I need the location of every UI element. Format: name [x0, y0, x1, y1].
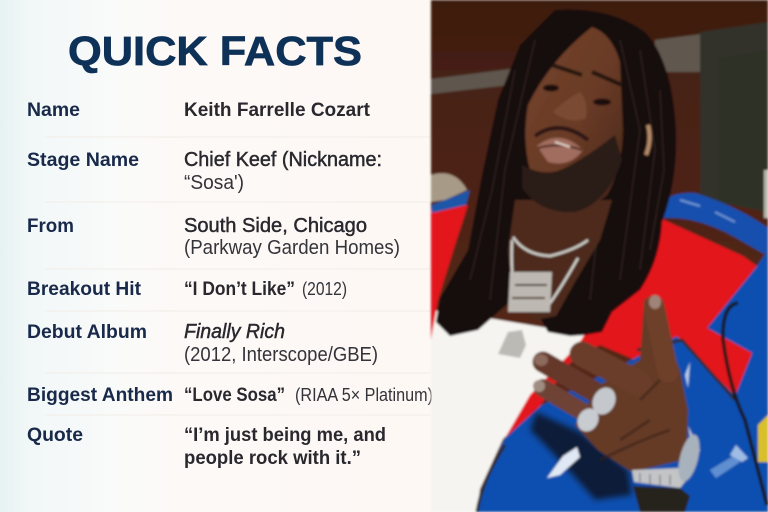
value: stage name	[184, 149, 382, 194]
ring	[588, 384, 620, 418]
label: breakout hit: Breakout Hit	[27, 278, 141, 300]
neck and chest	[508, 200, 612, 320]
value: biggest anthem: “Love Sosa”	[184, 384, 285, 406]
value: quote: people rock with it.”	[184, 447, 361, 469]
value: quote: “I’m just being me, and	[184, 424, 386, 446]
value: stage name: Chief Keef (Nickname:	[184, 149, 382, 171]
panel: quick facts	[0, 0, 433, 512]
ring	[573, 405, 603, 435]
portrait photo illustration	[431, 0, 768, 512]
value: quote	[184, 424, 386, 469]
row: stage name	[27, 149, 382, 194]
value: debut album: (2012, Interscope/GBE)	[184, 344, 378, 366]
row: name	[27, 99, 370, 121]
label: debut album: Debut Album	[27, 321, 147, 343]
label: name: Name	[27, 99, 80, 121]
value: stage name: “Sosa')	[184, 172, 244, 194]
value: debut album: Finally Rich	[184, 321, 285, 343]
value: from: South Side, Chicago	[184, 215, 367, 237]
value: biggest anthem: (RIAA 5× Platinum)	[295, 385, 433, 405]
label: from: From	[27, 215, 74, 237]
jacket: shadow below hand	[530, 412, 632, 500]
jacket: shine and zipper	[477, 303, 768, 512]
value: from	[184, 215, 400, 259]
value: biggest anthem	[184, 384, 433, 406]
watch	[632, 426, 704, 488]
value: breakout hit: “I Don’t Like”	[184, 278, 295, 300]
jacket: blue body	[477, 250, 768, 512]
jacket: red panels	[431, 190, 768, 438]
value: name: Keith Farrelle Cozart	[184, 99, 370, 121]
row: debut album	[27, 321, 378, 366]
label: biggest anthem: Biggest Anthem	[27, 384, 173, 406]
value: from: (Parkway Garden Homes)	[184, 237, 400, 259]
row: from	[27, 215, 400, 259]
heading: quick facts: QUICK FACTS	[68, 28, 362, 74]
row: breakout hit	[27, 278, 347, 300]
label: stage name: Stage Name	[27, 149, 139, 171]
white shirt	[431, 296, 603, 512]
value: debut album	[184, 321, 378, 366]
row: biggest anthem	[27, 384, 433, 406]
hair	[436, 9, 676, 336]
label: quote: Quote	[27, 424, 83, 446]
hand with rings and watch	[533, 295, 704, 512]
value: breakout hit: (2012)	[302, 279, 347, 299]
jewelry: necklaces and pendant	[498, 237, 588, 358]
face	[522, 27, 650, 212]
row: quote	[27, 424, 386, 469]
